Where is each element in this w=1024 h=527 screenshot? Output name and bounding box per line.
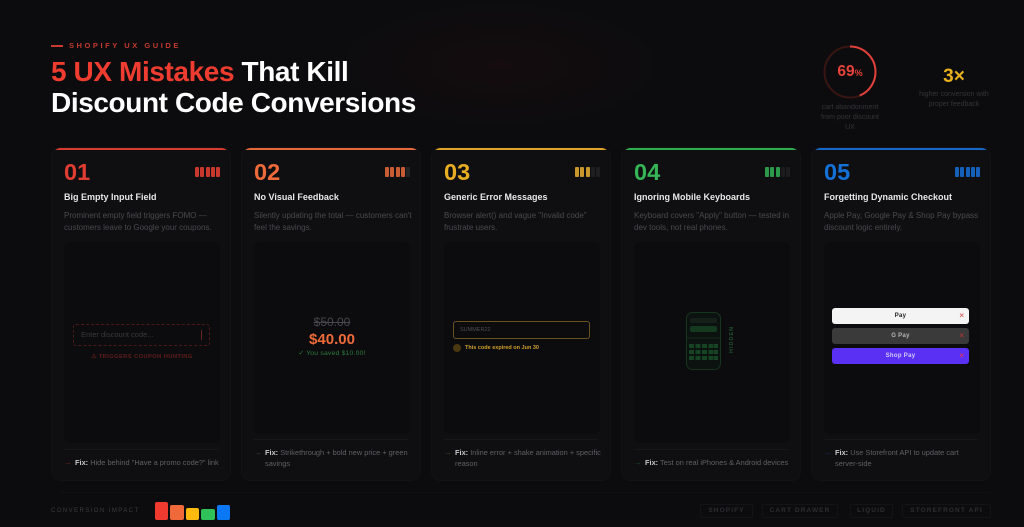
fix: savings — [265, 459, 290, 468]
heading: No Visual Feedback — [254, 192, 339, 202]
fix: Fix: Strikethrough + bold new price + green — [265, 448, 408, 457]
tag: shopify: SHOPIFY — [708, 507, 745, 514]
multiplier caption: higher conversion with — [919, 90, 989, 98]
description — [254, 211, 412, 232]
heading: Generic Error Messages — [444, 192, 548, 202]
stat: 3x — [919, 66, 989, 108]
apple pay button: × — [959, 311, 964, 320]
severity meter — [385, 167, 410, 177]
hidden label: HIDDEN — [729, 326, 735, 353]
fix: → — [254, 448, 262, 457]
ring caption — [821, 104, 879, 130]
fix: → — [444, 448, 452, 457]
impact bar chart — [155, 502, 230, 520]
dashed input: Enter discount code... — [81, 330, 154, 339]
shop pay button — [832, 348, 969, 364]
fix: → — [824, 448, 832, 457]
ring value: 69% — [837, 63, 863, 80]
ring caption: cart abandonment — [822, 104, 878, 110]
fix: → — [634, 458, 642, 467]
multiplier caption — [919, 90, 989, 108]
panel: card 03 — [431, 147, 611, 481]
apple pay button: Pay — [895, 313, 906, 319]
demo: wallet buttons — [824, 242, 980, 434]
fix: Fix: Test on real iPhones & Android devices — [645, 458, 788, 467]
description: dev tools, not real phones. — [634, 222, 728, 232]
title: 5 UX Mistakes That Kill — [51, 56, 348, 87]
old price: $50.00 — [314, 315, 350, 329]
error message: This code expired on Jun 30 — [465, 345, 539, 351]
google pay button — [832, 328, 969, 344]
description: customers leave to Google your coupons. — [64, 222, 212, 232]
description: Keyboard covers "Apply" button — tested in — [634, 211, 789, 220]
description: Prominent empty field triggers FOMO — — [64, 211, 207, 220]
panel: card 04 — [621, 147, 801, 481]
description — [634, 211, 789, 232]
shop pay button: × — [959, 350, 964, 360]
tag: cart drawer — [762, 504, 838, 518]
panel: card 01 — [51, 147, 231, 481]
error message — [453, 344, 539, 352]
description: frustrate users. — [444, 222, 497, 232]
fix: reason — [455, 459, 478, 468]
dashed input — [73, 324, 210, 346]
description: discount logic entirely. — [824, 222, 902, 232]
error input: SUMMER22 — [460, 327, 491, 333]
tag: cart drawer: CART DRAWER — [770, 507, 830, 514]
savings: ✓ You saved $10.00! — [298, 350, 366, 357]
panel: card 05 — [811, 147, 991, 481]
description — [64, 211, 212, 232]
fix: Fix: Inline error + shake animation + specific — [455, 448, 601, 457]
fix: Fix: Hide behind "Have a promo code?" link — [75, 458, 219, 467]
multiplier value: 3× — [943, 66, 965, 87]
error input — [453, 321, 590, 339]
number 03: 03 — [444, 159, 470, 185]
description: Browser alert() and vague "Invalid code" — [444, 211, 587, 220]
warning label: ⚠ TRIGGERS COUPON HUNTING — [91, 354, 193, 360]
demo: price update — [254, 242, 410, 434]
tag: storefront api: STOREFRONT API — [910, 507, 983, 514]
title — [51, 56, 416, 118]
number 01: 01 — [64, 159, 90, 185]
new price: $40.00 — [309, 331, 355, 348]
description — [444, 211, 587, 232]
ring caption: UX — [845, 124, 855, 130]
google pay button: × — [959, 331, 964, 340]
demo: inline error — [444, 242, 600, 434]
google pay button: G Pay — [891, 333, 910, 339]
multiplier caption: proper feedback — [929, 100, 979, 108]
severity meter — [195, 167, 220, 177]
tag: liquid — [850, 504, 893, 518]
conversion impact label: CONVERSION IMPACT — [51, 508, 140, 514]
demo: phone — [634, 242, 790, 443]
title: Discount Code Conversions — [51, 87, 416, 118]
stat: 69% ring — [821, 46, 879, 130]
panel: card 02 — [241, 147, 421, 481]
apple pay button — [832, 308, 969, 324]
ring chart — [824, 46, 876, 98]
severity meter — [765, 167, 790, 177]
heading: Forgetting Dynamic Checkout — [824, 192, 952, 202]
fix: Fix: Use Storefront API to update cart — [835, 448, 959, 457]
number 05: 05 — [824, 159, 850, 185]
heading: Ignoring Mobile Keyboards — [634, 192, 750, 202]
severity meter — [575, 167, 600, 177]
severity meter — [955, 167, 980, 177]
fix: server-side — [835, 459, 872, 468]
phone keyboard icon — [686, 312, 721, 370]
eyebrow label: SHOPIFY UX GUIDE — [69, 41, 181, 50]
tag: storefront api — [902, 504, 991, 518]
description: Silently updating the total — customers can't — [254, 211, 412, 220]
description — [824, 211, 978, 232]
number 04: 04 — [634, 159, 660, 185]
description: feel the savings. — [254, 222, 312, 232]
demo: empty input — [64, 242, 220, 443]
ring caption: from poor discount — [821, 114, 879, 120]
fix — [444, 448, 601, 468]
heading: Big Empty Input Field — [64, 192, 156, 202]
fix: → — [64, 458, 72, 467]
shop pay button: Shop Pay — [886, 352, 915, 358]
number 02: 02 — [254, 159, 280, 185]
tag: liquid: LIQUID — [857, 507, 886, 514]
tag: shopify — [700, 504, 753, 518]
fix — [824, 448, 959, 468]
background red glow — [330, 0, 670, 130]
fix — [254, 448, 408, 468]
description: Apple Pay, Google Pay & Shop Pay bypass — [824, 211, 978, 220]
